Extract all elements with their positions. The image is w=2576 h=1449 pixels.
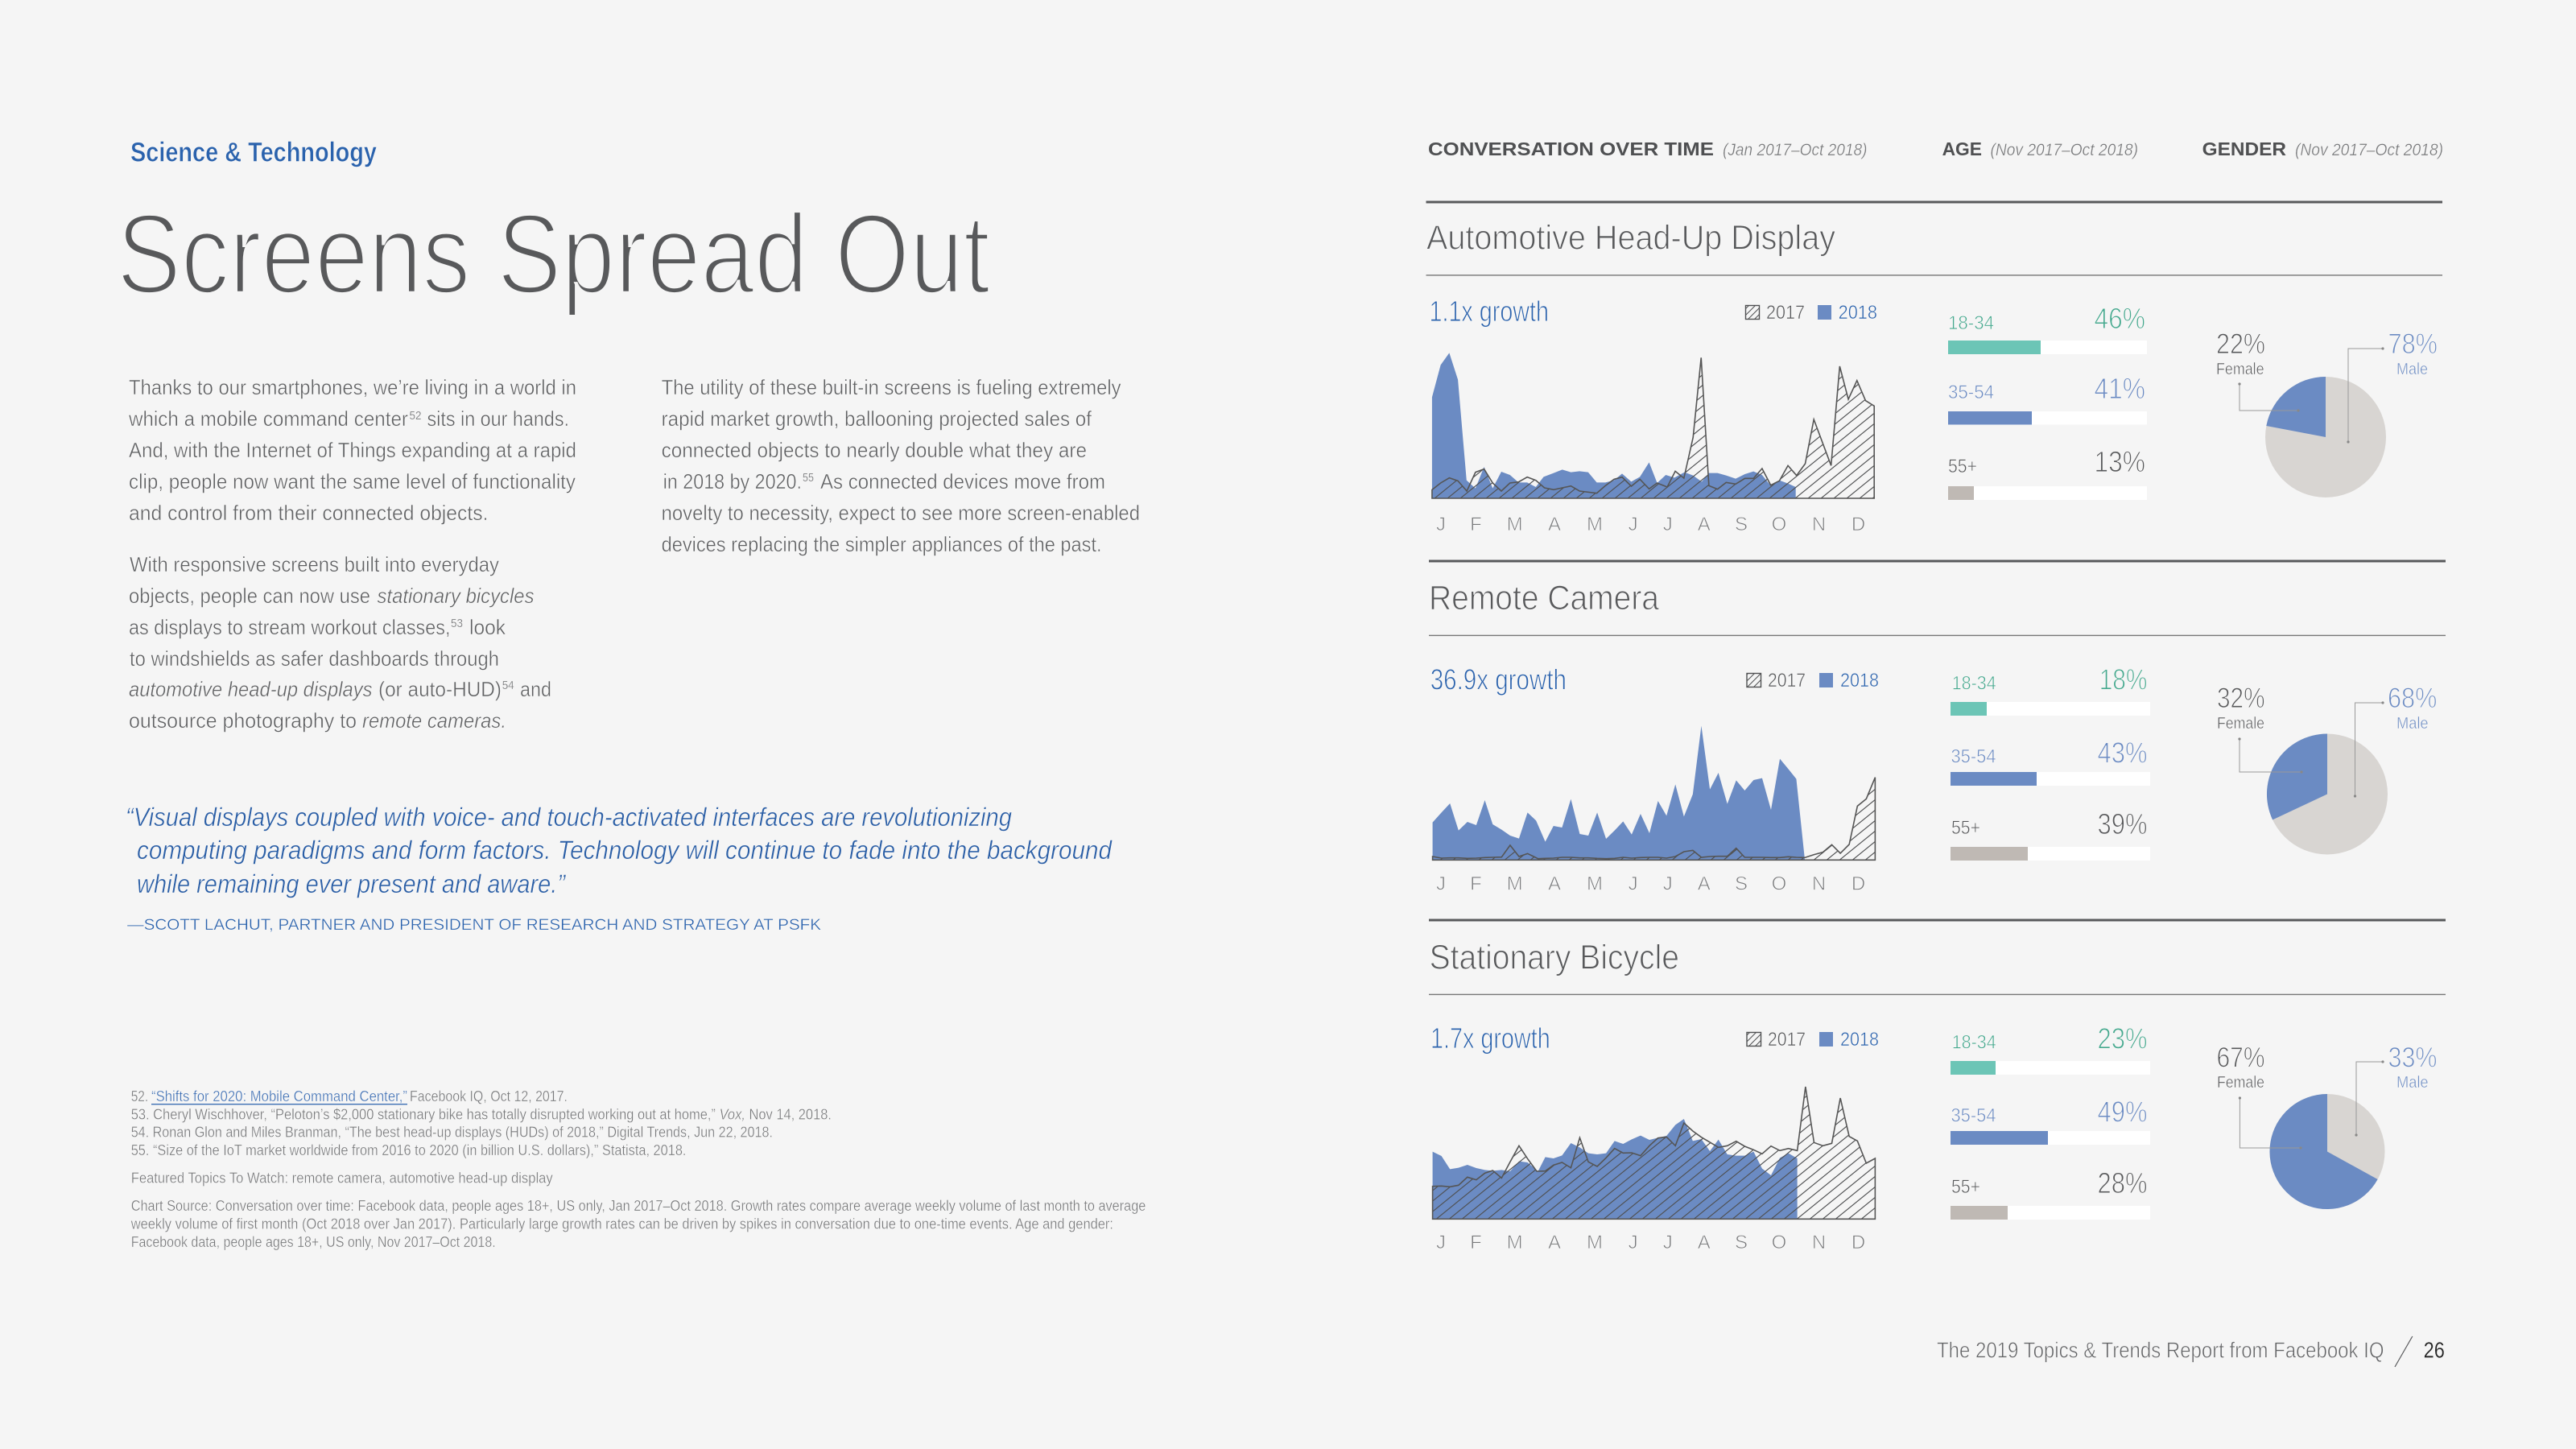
gender pie <box>2217 1042 2438 1209</box>
age bars <box>1948 302 2147 500</box>
gender pie: 67% <box>2217 1042 2265 1074</box>
growth label: 1.1x growth <box>1430 295 1549 328</box>
column headers: (Nov 2017–Oct 2018) <box>2295 141 2443 159</box>
age bars: 41% <box>2095 372 2145 405</box>
text block: second column: devices replacing the simpler appliances of the past. <box>662 532 1102 556</box>
area chart <box>1429 346 1880 499</box>
text block: intro column paragraph 1: which a mobile command center <box>128 407 408 431</box>
text block: intro column paragraph 2: automotive head-up displays <box>129 677 372 701</box>
legend: 2018 <box>1840 1029 1879 1051</box>
gender pie <box>2216 328 2438 497</box>
column headers: AGE <box>1942 138 1982 159</box>
month axis: JFMAMJJASOND <box>1436 873 1865 895</box>
quote attribution: —SCOTT LACHUT, PARTNER AND PRESIDENT OF RESEARCH AND STRATEGY AT PSFK <box>127 917 821 934</box>
text block: intro column paragraph 2: 54 <box>502 679 514 692</box>
age bars: 55+ <box>1951 817 1980 839</box>
column headers <box>1428 138 2443 159</box>
age bars: 55+ <box>1948 456 1977 477</box>
footnotes: Facebook IQ, Oct 12, 2017. <box>410 1088 568 1104</box>
age bars <box>1951 1022 2150 1220</box>
gender pie: Male <box>2396 1074 2429 1092</box>
age bars: 43% <box>2098 737 2148 770</box>
age bars: 18-34 <box>1952 673 1996 695</box>
gender pie: 32% <box>2217 683 2265 714</box>
gender pie: Female <box>2216 361 2264 378</box>
age bars: 18-34 <box>1952 1032 1996 1054</box>
legend: 2017 <box>1766 302 1805 324</box>
age bars: 55+ <box>1951 1176 1980 1198</box>
heading: Remote Camera <box>1429 579 1659 617</box>
gender pie: 68% <box>2388 683 2437 714</box>
featured topics note: Featured Topics To Watch: remote camera, automotive head-up display <box>131 1170 553 1187</box>
column headers: GENDER <box>2202 138 2286 159</box>
text block: intro column paragraph 2: remote cameras. <box>362 708 506 733</box>
footnotes <box>130 1088 1146 1250</box>
text block: intro column paragraph 1: And, with the Internet of Things expanding at a rapid <box>129 438 576 462</box>
heading: Automotive Head-Up Display <box>1426 219 1835 258</box>
text block: intro column paragraph 2: outsource photography to <box>129 708 357 733</box>
age bars: 28% <box>2098 1166 2148 1199</box>
gender pie: 33% <box>2388 1042 2438 1074</box>
text block: intro column paragraph 2: look <box>469 615 506 639</box>
column headers: (Jan 2017–Oct 2018) <box>1723 141 1868 159</box>
text block: intro column paragraph 1 <box>128 375 576 525</box>
chart source note: Facebook data, people ages 18+, US only, Nov 2017–Oct 2018. <box>131 1233 496 1250</box>
chart source note <box>130 1197 1146 1250</box>
text block: intro column paragraph 2: With responsive screens built into everyday <box>130 552 499 576</box>
section label: Science & Technology <box>130 137 377 167</box>
text block: second column: rapid market growth, ballooning projected sales of <box>662 407 1092 431</box>
page number: 26 <box>2424 1338 2445 1363</box>
column headers: CONVERSATION OVER TIME <box>1428 138 1714 159</box>
age bars: 46% <box>2095 302 2145 335</box>
age bars: 35-54 <box>1948 382 1994 403</box>
gender pie <box>2217 683 2437 855</box>
age bars: 49% <box>2098 1096 2148 1129</box>
footnotes: 54. Ronan Glon and Miles Branman, “The best head-up displays (HUDs) of 2018,” Digital Trends, Jun 22, 2018. <box>131 1124 773 1141</box>
gender pie: Male <box>2396 715 2429 733</box>
age bars: 35-54 <box>1951 746 1996 768</box>
callout: quote: computing paradigms and form factors. Technology will continue to fade into the background <box>137 836 1113 865</box>
text block: intro column paragraph 1: 52 <box>409 409 422 423</box>
age bars: 35-54 <box>1951 1105 1996 1127</box>
text block: second column: connected objects to nearly double what they are <box>662 438 1087 462</box>
growth label: 36.9x growth <box>1430 663 1567 696</box>
age bars: 13% <box>2095 445 2145 478</box>
text block: intro column paragraph 2: as displays to stream workout classes, <box>129 615 451 639</box>
text block: second column: in 2018 by 2020. <box>663 469 802 493</box>
legend: 2017 <box>1768 1029 1806 1051</box>
legend <box>1745 302 1877 324</box>
chart source note: Chart Source: Conversation over time: Facebook data, people ages 18+, US only, Jan 2017–Oct 2018. Growth rates compare average weekly volume of last month to average <box>131 1197 1146 1214</box>
legend: 2017 <box>1768 670 1806 691</box>
text block: second column: novelty to necessity, expect to see more screen-enabled <box>662 501 1140 525</box>
gender pie: Male <box>2396 361 2428 378</box>
growth label: 1.7x growth <box>1430 1022 1550 1055</box>
legend: 2018 <box>1839 302 1877 324</box>
text block: intro column paragraph 2: (or auto-HUD) <box>378 677 502 701</box>
age bars: 23% <box>2098 1022 2148 1055</box>
footer: The 2019 Topics & Trends Report from Facebook IQ <box>1937 1338 2384 1363</box>
text block: intro column paragraph 2: and <box>520 677 551 701</box>
footnotes: 53. Cheryl Wischhover, “Peloton’s $2,000 stationary bike has totally disrupted working out at home,” Vox, Nov 14, 2018. <box>131 1106 832 1123</box>
footnotes: “Shifts for 2020: Mobile Command Center,” <box>151 1088 407 1104</box>
gender pie: 78% <box>2388 328 2438 360</box>
gender pie: Female <box>2217 1074 2264 1092</box>
text block: intro column paragraph 1: sits in our hands. <box>427 407 569 431</box>
age bars: 39% <box>2098 807 2148 840</box>
footnotes: 52. <box>131 1088 148 1104</box>
text block: intro column paragraph 1: and control from their connected objects. <box>129 501 488 525</box>
footnotes: 55. “Size of the IoT market worldwide from 2016 to 2020 (in billion U.S. dollars),” Statista, 2018. <box>131 1141 686 1158</box>
callout: quote <box>126 803 1113 934</box>
legend <box>1747 670 1879 691</box>
area chart <box>1429 724 1880 861</box>
age bars <box>1951 663 2150 861</box>
legend: 2018 <box>1840 670 1879 691</box>
legend <box>1747 1029 1879 1051</box>
text block: second column: 55 <box>803 471 814 485</box>
month axis: JFMAMJJASOND <box>1436 514 1865 535</box>
age bars: 18% <box>2099 663 2148 696</box>
text block: intro column paragraph 1: clip, people now want the same level of functionality <box>129 469 576 493</box>
text block: intro column paragraph 2 <box>129 552 551 733</box>
gender pie: Female <box>2217 715 2264 733</box>
panel: Automotive Head-Up Display <box>1426 219 2442 535</box>
callout: quote: “Visual displays coupled with voice- and touch-activated interfaces are revolutionizing <box>126 803 1012 832</box>
gender pie: 22% <box>2216 328 2265 360</box>
panel: Stationary Bicycle <box>1429 939 2446 1253</box>
month axis: JFMAMJJASOND <box>1436 1232 1865 1253</box>
chart source note: weekly volume of first month (Oct 2018 over Jan 2017). Particularly large growth rates can be driven by spikes in conversation due to one-time events. Age and gender: <box>130 1216 1113 1232</box>
text block: intro column paragraph 2: 53 <box>451 617 463 630</box>
text block: intro column paragraph 2: to windshields as safer dashboards through <box>130 646 499 671</box>
column headers: (Nov 2017–Oct 2018) <box>1990 141 2138 159</box>
title: Screens Spread Out <box>117 190 990 317</box>
text block: second column: The utility of these built-in screens is fueling extremely <box>662 375 1121 399</box>
text block: intro column paragraph 2: objects, people can now use <box>129 584 370 608</box>
text block: intro column paragraph 1: Thanks to our smartphones, we’re living in a world in <box>129 375 576 399</box>
text block: second column: As connected devices move from <box>820 469 1105 493</box>
text block: second column <box>662 375 1140 556</box>
area chart <box>1429 1079 1880 1220</box>
panel: Remote Camera <box>1429 579 2446 895</box>
callout: quote: while remaining ever present and aware.” <box>137 869 566 898</box>
text block: intro column paragraph 2: stationary bicycles <box>377 584 535 608</box>
heading: Stationary Bicycle <box>1430 939 1679 977</box>
age bars: 18-34 <box>1948 312 1994 334</box>
